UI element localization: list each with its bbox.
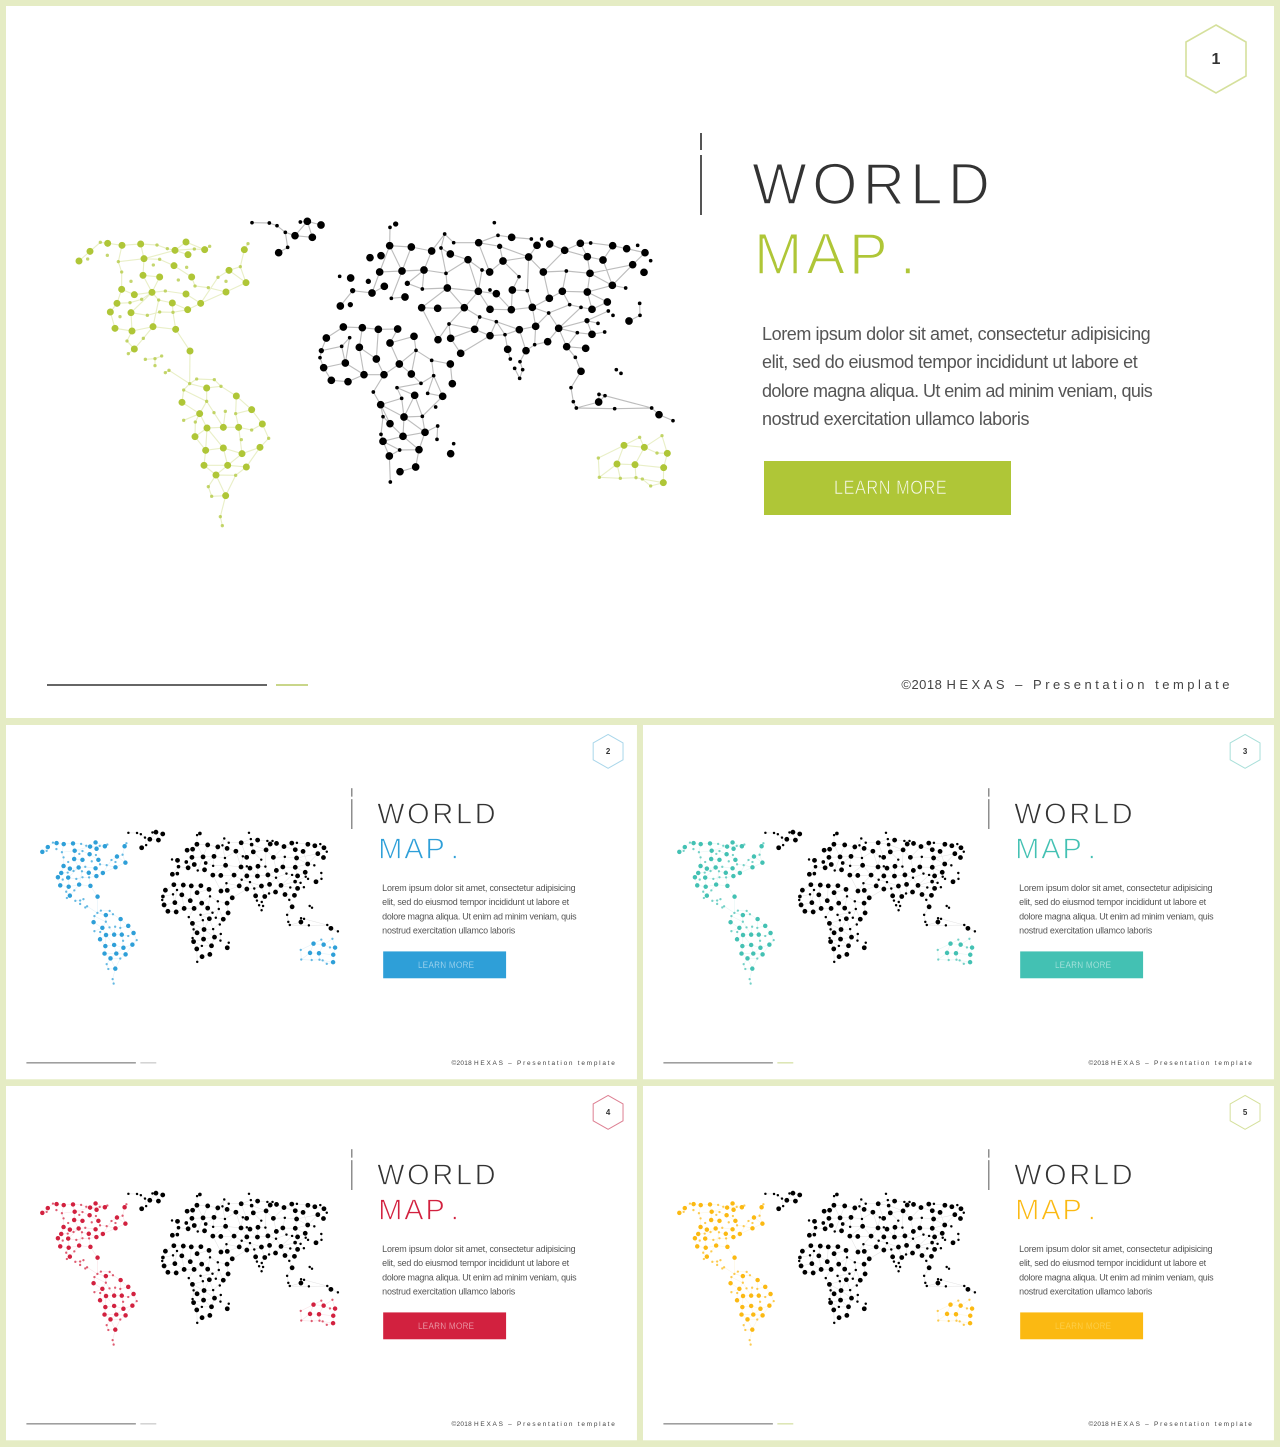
hexagon page number 4: [592, 1094, 624, 1130]
hexagon page number 2: 2: [606, 747, 611, 756]
title: world: WORLD: [377, 1159, 498, 1191]
world map network: [40, 1190, 340, 1346]
button: learn more: LEARN MORE: [1055, 1321, 1111, 1331]
americas dots and links: [79, 242, 269, 526]
body text: Lorem ipsum dolor sit amet, consectetur adipisicing: [762, 324, 1150, 344]
button: learn more: [383, 951, 506, 978]
body text: dolore magna aliqua. Ut enim ad minim veniam, quis: [1019, 912, 1213, 922]
hexagon page number 4: 4: [606, 1108, 611, 1117]
button: learn more: [383, 1312, 506, 1339]
title accent bar: [988, 788, 990, 829]
button: learn more: [1020, 951, 1143, 978]
footer accent rule: [777, 1422, 793, 1425]
footer accent rule: [777, 1061, 793, 1064]
world map network: [40, 830, 340, 985]
body text: Lorem ipsum dolor sit amet, consectetur adipisicing: [382, 883, 575, 893]
button: learn more: LEARN MORE: [418, 960, 474, 970]
hexagon page number 2: [592, 734, 624, 769]
body text: [1019, 883, 1214, 935]
body text: elit, sed do eiusmod tempor incididunt ut labore et: [1019, 1258, 1206, 1268]
greenland dots and links: [252, 221, 321, 253]
hexagon page number 3: 3: [1243, 747, 1248, 756]
title accent bar: [351, 1149, 352, 1190]
world map network: [677, 830, 976, 985]
panel: slide 2 blue: [6, 725, 637, 1079]
panel: slide 4 red: [6, 1086, 637, 1440]
footer copyright: ©2018 HEXAS – Presentation template: [901, 677, 1233, 692]
hexagon page number 1: 1: [1212, 51, 1221, 68]
body text: Lorem ipsum dolor sit amet, consectetur adipisicing: [1019, 883, 1212, 893]
body text: elit, sed do eiusmod tempor incididunt ut labore et: [762, 352, 1137, 372]
body text: dolore magna aliqua. Ut enim ad minim veniam, quis: [762, 381, 1152, 401]
body text: [382, 883, 576, 935]
body text: [382, 1244, 576, 1296]
body text: nostrud exercitation ullamco laboris: [382, 1287, 515, 1296]
footer accent rule: [140, 1422, 156, 1425]
footer accent rule: [276, 684, 308, 686]
body text: Lorem ipsum dolor sit amet, consectetur adipisicing: [1019, 1244, 1212, 1254]
body text: nostrud exercitation ullamco laboris: [1019, 926, 1152, 935]
world map network: [677, 1190, 976, 1346]
title accent bar: [351, 788, 352, 829]
body text: elit, sed do eiusmod tempor incididunt ut labore et: [382, 897, 569, 907]
footer copyright: ©2018 HEXAS – Presentation template: [452, 1420, 617, 1427]
footer copyright: ©2018 HEXAS – Presentation template: [1089, 1420, 1254, 1427]
hexagon page number 5: 5: [1243, 1108, 1248, 1117]
footer copyright: ©2018 HEXAS – Presentation template: [1089, 1059, 1254, 1066]
hexagon page number 3: [1230, 734, 1260, 769]
body text: nostrud exercitation ullamco laboris: [762, 409, 1029, 429]
panel: slide 1 green: [6, 6, 1274, 718]
world map network: [76, 218, 675, 528]
title accent bar: [988, 1149, 990, 1190]
body text: nostrud exercitation ullamco laboris: [1019, 1287, 1152, 1296]
footer rule: [47, 684, 267, 686]
body text: elit, sed do eiusmod tempor incididunt ut labore et: [382, 1258, 569, 1268]
body text: dolore magna aliqua. Ut enim ad minim veniam, quis: [1019, 1273, 1213, 1283]
hexagon page number 1: [1185, 24, 1247, 94]
hexagon page number 5: [1230, 1094, 1260, 1130]
title: world: WORLD: [1014, 1159, 1135, 1191]
body text: nostrud exercitation ullamco laboris: [382, 926, 515, 935]
title: world: WORLD: [1014, 798, 1135, 830]
title accent bar: [700, 133, 702, 215]
panel: slide 3 teal: [643, 725, 1274, 1079]
footer rule: [26, 1422, 136, 1425]
footer rule: [26, 1061, 136, 1064]
button: learn more: [764, 461, 1011, 515]
body text: [762, 324, 1152, 429]
footer copyright: ©2018 HEXAS – Presentation template: [452, 1059, 617, 1066]
europe asia africa dots and links: [320, 223, 673, 482]
footer rule: [663, 1422, 773, 1425]
panel: slide 5 yellow: [643, 1086, 1274, 1440]
title: world: WORLD: [752, 152, 995, 217]
footer rule: [663, 1061, 773, 1064]
body text: dolore magna aliqua. Ut enim ad minim veniam, quis: [382, 912, 576, 922]
body text: [1019, 1244, 1214, 1296]
button: learn more: [1020, 1312, 1143, 1339]
button: learn more: LEARN MORE: [834, 478, 947, 499]
button: learn more: LEARN MORE: [1055, 960, 1111, 970]
body text: elit, sed do eiusmod tempor incididunt ut labore et: [1019, 897, 1206, 907]
title: map: MAP.: [378, 832, 461, 865]
button: learn more: LEARN MORE: [418, 1321, 474, 1331]
title: map: MAP.: [754, 222, 920, 287]
title: map: MAP.: [378, 1193, 461, 1226]
body text: dolore magna aliqua. Ut enim ad minim veniam, quis: [382, 1273, 576, 1283]
footer accent rule: [140, 1061, 156, 1064]
australia dots and links: [598, 436, 667, 486]
title: map: MAP.: [1015, 832, 1098, 865]
title: map: MAP.: [1015, 1193, 1098, 1226]
title: world: WORLD: [377, 798, 498, 830]
body text: Lorem ipsum dolor sit amet, consectetur adipisicing: [382, 1244, 575, 1254]
